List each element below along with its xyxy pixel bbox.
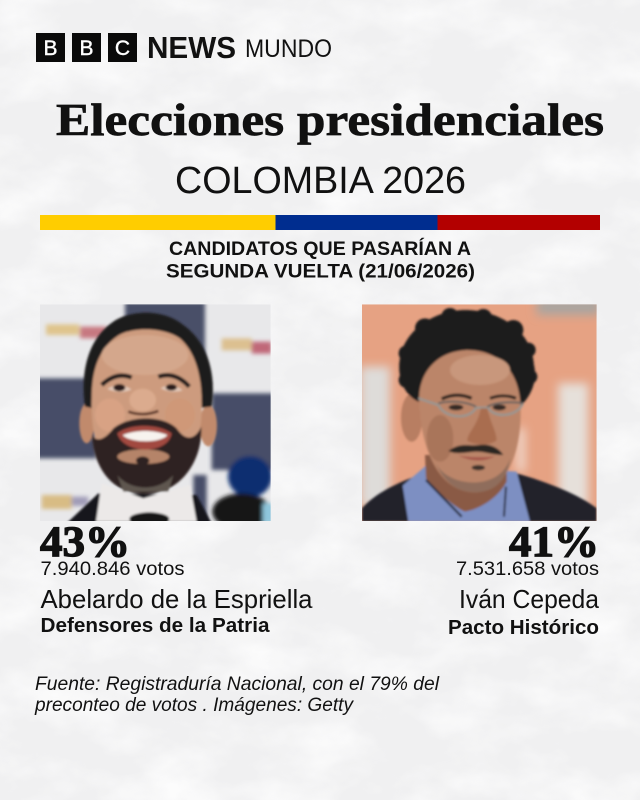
heading: candidates to runoff: CANDIDATOS QUE PASARÍAN A [169,237,471,260]
nose [129,389,156,411]
candidate result: Iván Cepeda [448,519,600,639]
party: Pacto Histórico [448,617,599,639]
beard [92,418,201,494]
logo: BBC News Mundo: C [115,37,130,60]
cardigan [362,473,597,522]
ear [401,394,422,442]
percentage: 43%: 43% [40,519,130,566]
subtitle: Colombia 2026: COLOMBIA 2026 [175,160,466,202]
votes: 7.531.658 votos [456,559,599,580]
source note: preconteo de votos . Imágenes: Getty [34,695,354,716]
photo: Abelardo de la Espriella [33,302,276,530]
shirt [403,466,530,522]
neck [425,455,507,512]
logo: BBC News Mundo: NEWS [147,30,236,65]
brows and eyes [102,376,132,385]
percentage: 41%: 41% [509,519,599,566]
logo: BBC News Mundo [36,30,332,65]
title: Elecciones presidenciales [56,94,604,145]
candidate result: Abelardo de la Espriella [40,519,313,637]
logo: BBC News Mundo: MUNDO [245,35,332,63]
nose [467,408,497,444]
source note [34,674,440,716]
heading: candidates to runoff: SEGUNDA VUELTA (21/06/2026) [166,260,475,282]
votes: 7.940.846 votos [40,559,184,580]
moustache and mouth [448,445,503,455]
logo: BBC News Mundo: B [43,37,58,60]
glasses [418,398,523,416]
logo: BBC News Mundo: B [79,37,94,60]
brows and eyes [442,395,472,399]
photo: Iván Cepeda [360,298,600,522]
flag colour bar [40,215,600,230]
name: Iván Cepeda [459,584,600,614]
heading: candidates to runoff [166,237,475,282]
face [89,327,204,441]
jacket and shirt [67,493,212,523]
name: Abelardo de la Espriella [40,584,313,614]
open mouth [117,426,172,450]
ears [79,403,94,443]
face [419,350,521,492]
source note: Fuente: Registraduría Nacional, con el 79% del [35,674,440,695]
hair [84,313,213,408]
hair [399,308,537,405]
party: Defensores de la Patria [40,615,270,637]
